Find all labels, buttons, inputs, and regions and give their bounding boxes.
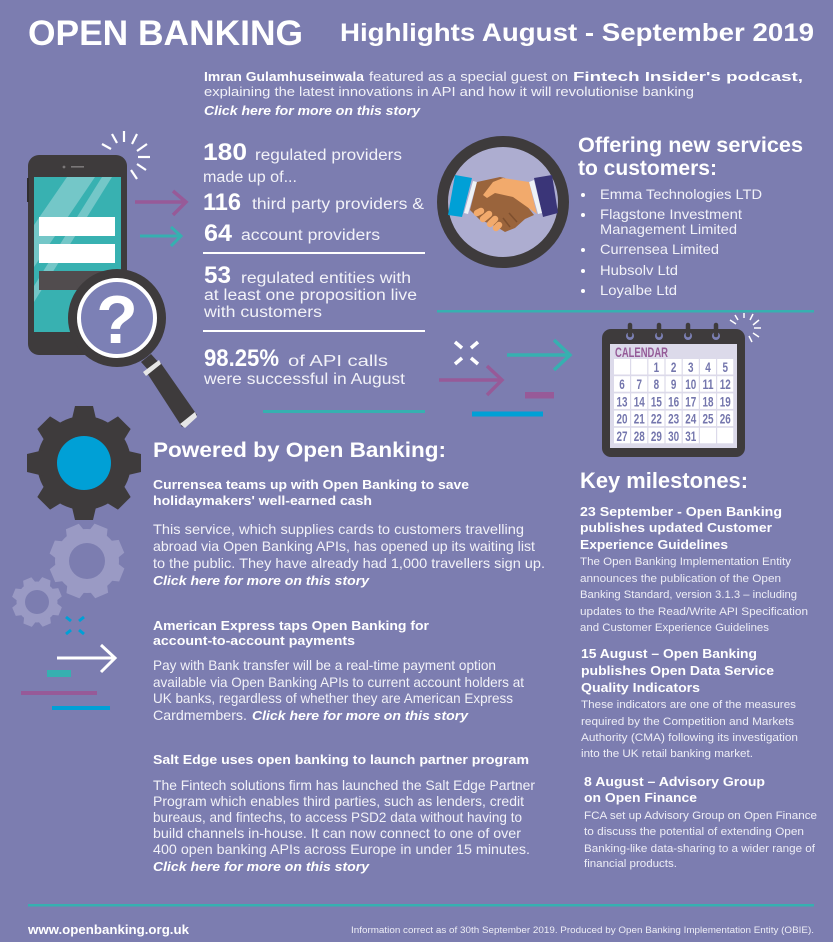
calendar grid: 12 [720, 376, 731, 392]
calendar grid: 1 [654, 359, 659, 375]
decoration: arrows and dashes beside calendar [439, 340, 570, 416]
calendar grid: 24 [685, 411, 696, 427]
calendar rings [626, 325, 720, 340]
story: Salt Edge [153, 752, 535, 874]
milestone: 15 August: publishes Open Data Service [581, 663, 774, 678]
calendar grid: 14 [634, 393, 645, 409]
list: service providers: Management Limited [600, 221, 737, 237]
stat: 180 regulated providers [203, 139, 425, 247]
arrow: magenta [135, 191, 186, 215]
icon: calendar [602, 325, 745, 457]
heading: key milestones: Key milestones: [580, 468, 748, 493]
stat: 180 regulated providers: account providers [241, 227, 380, 244]
story: Salt Edge: Program which enables third parties, such as lenders, credit [153, 793, 524, 809]
milestone: 15 August: into the UK retail banking market. [581, 748, 753, 760]
logo: Open Banking: OPEN BANKING [28, 14, 303, 53]
calendar grid: 20 [616, 411, 628, 427]
milestone: 8 August: Banking-like data-sharing to a wider range of [584, 843, 816, 855]
calendar grid: 13 [616, 393, 628, 409]
milestone: 23 September: announces the publication of the Open [580, 573, 781, 585]
story: Salt Edge: Click here for more on this story [153, 859, 370, 874]
milestone: 23 September: updates to the Read/Write API Specification [580, 606, 808, 618]
calendar grid: 19 [720, 393, 731, 409]
milestone: 15 August: required by the Competition and Markets [581, 716, 794, 728]
story: American Express: Click here for more on this story [252, 708, 469, 723]
calendar grid [614, 359, 733, 444]
calendar grid: 3 [688, 359, 694, 375]
stat: 180 regulated providers: made up of... [203, 169, 297, 186]
calendar grid: 7 [636, 376, 642, 392]
stat: 98.25% API calls: were successful in August [203, 371, 406, 388]
story: American Express: UK banks, regardless of whether they are American Express [153, 690, 513, 706]
calendar grid: 31 [685, 428, 696, 444]
milestone: 15 August: Authority (CMA) following its investigation [581, 732, 798, 744]
calendar grid: 26 [720, 411, 731, 427]
stat: 180 regulated providers: 116 [203, 189, 241, 216]
story: American Express: available via Open Banking APIs to current account holders at [153, 674, 524, 690]
story: Currensea: to the public. They have already had 1,000 travellers sign up. [153, 555, 545, 571]
story: Currensea: Currensea teams up with Open Banking to save [153, 477, 469, 492]
list: service providers: Currensea Limited [600, 241, 719, 257]
story: American Express: American Express taps Open Banking for [153, 618, 429, 633]
calendar grid: 6 [619, 376, 625, 392]
stat: 180 regulated providers: regulated providers [255, 147, 402, 164]
list: service providers: Hubsolv Ltd [600, 262, 678, 278]
story: American Express: Cardmembers. [153, 707, 247, 723]
story: American Express: account-to-account payments [153, 633, 355, 648]
story: Currensea [153, 477, 545, 588]
stat: 53 regulated entities [203, 262, 417, 321]
story: Currensea: This service, which supplies cards to customers travelling [153, 521, 524, 537]
intro text block [204, 69, 803, 118]
stat: 180 regulated providers: 64 [204, 220, 233, 247]
story: Salt Edge: 400 open banking APIs across Europe in under 15 minutes. [153, 841, 530, 857]
list: service providers [581, 186, 762, 298]
calendar grid: 9 [671, 376, 676, 392]
milestone: 8 August: on Open Finance [584, 790, 697, 805]
icon: handshake [442, 142, 564, 262]
footer: disclaimer: Information correct as of 30th September 2019. Produced by Open Banking Implementation Entity (OBIE). [351, 925, 814, 935]
calendar grid: 8 [654, 376, 659, 392]
footer: website: www.openbanking.org.uk [27, 922, 190, 937]
heading: powered by open banking: Powered by Open Banking: [153, 439, 446, 462]
heading: offering new services [578, 134, 803, 180]
calendar grid: 4 [705, 359, 711, 375]
arrow: teal [140, 227, 181, 246]
stat: 98.25% API calls [203, 345, 406, 388]
icon: small faded gear [11, 576, 63, 628]
calendar grid: 29 [651, 428, 662, 444]
stat: 98.25% API calls: of API calls [288, 353, 388, 370]
title: Highlights August - September 2019 [340, 19, 814, 47]
stat: 53 regulated entities: at least one proposition live [204, 287, 417, 304]
story: Currensea: Click here for more on this story [153, 573, 370, 588]
story: Currensea: holidaymakers' well-earned cash [153, 493, 372, 508]
list: service providers: Flagstone Investment [600, 206, 742, 222]
icon: phone with magnifying glass [27, 131, 197, 428]
milestone: 23 September: The Open Banking Implementation Entity [580, 556, 791, 568]
magnifying glass: ? [96, 282, 138, 358]
calendar grid: 27 [616, 428, 628, 444]
calendar grid: 23 [668, 411, 679, 427]
milestone: 15 August: 15 August – Open Banking [581, 646, 757, 661]
calendar grid: 17 [685, 393, 696, 409]
calendar grid: 28 [634, 428, 645, 444]
calendar grid: 10 [685, 376, 696, 392]
intro text block: Imran Gulamhuseinwala [204, 69, 365, 84]
phone body [27, 155, 127, 355]
intro text block: explaining the latest innovations in API and how it will revolutionise banking [204, 84, 694, 99]
milestone: 15 August: Quality Indicators [581, 680, 700, 695]
calendar grid: 18 [702, 393, 714, 409]
milestone: 8 August: FCA set up Advisory Group on Open Finance [584, 810, 817, 822]
calendar grid: 15 [651, 393, 662, 409]
milestone: 8 August [584, 774, 817, 870]
calendar grid: 22 [651, 411, 662, 427]
milestone: 8 August: to discuss the potential of extending Open [584, 826, 804, 838]
calendar grid: 21 [634, 411, 645, 427]
milestone: 23 September: Banking Standard, version 3.1.3 – including [580, 589, 797, 601]
intro text block: Click here for more on this story [204, 103, 421, 118]
stat: 53 regulated entities: with customers [203, 304, 322, 321]
calendar grid: 30 [668, 428, 679, 444]
sparkle lines: calendar [730, 313, 761, 342]
milestone: 15 August [581, 646, 798, 760]
story: Salt Edge: Salt Edge uses open banking to launch partner program [153, 752, 529, 767]
stat: 180 regulated providers: 180 [203, 139, 247, 166]
calendar grid: 5 [722, 359, 728, 375]
calendar grid: 11 [702, 376, 714, 392]
heading: offering new services: Offering new services [578, 134, 803, 157]
icon: medium faded gear [48, 522, 126, 600]
story: Salt Edge: The Fintech solutions firm has launched the Salt Edge Partner [153, 777, 535, 793]
calendar grid: 25 [702, 411, 714, 427]
milestone: 23 September: 23 September - Open Banking [580, 504, 782, 519]
stat: 53 regulated entities: 53 [204, 262, 231, 289]
calendar grid: 2 [671, 359, 676, 375]
milestone: 8 August: 8 August – Advisory Group [584, 774, 765, 789]
milestone: 23 September: Experience Guidelines [580, 537, 728, 552]
heading: offering new services: to customers: [578, 157, 717, 180]
milestone: 23 September: and Customer Experience Guidelines [580, 622, 769, 634]
magnifying glass [68, 269, 197, 428]
milestone: 23 September: publishes updated Customer [580, 520, 772, 535]
story: Currensea: abroad via Open Banking APIs, has opened up its waiting list [153, 538, 535, 554]
story: Salt Edge: build channels in-house. It can now connect to one of over [153, 825, 521, 841]
sparkle lines [102, 131, 150, 179]
milestone: 23 September [580, 504, 808, 634]
decoration: white arrow and coloured dashes [21, 617, 115, 710]
calendar title: CALENDAR [615, 344, 668, 360]
stat: 180 regulated providers: third party providers & [252, 196, 425, 213]
milestone: 8 August: financial products. [584, 858, 677, 870]
story: Salt Edge: bureaus, and fintechs, to access PSD2 data without having to [153, 809, 522, 825]
milestone: 15 August: These indicators are one of the measures [581, 699, 796, 711]
calendar grid: 16 [668, 393, 679, 409]
list: service providers: Emma Technologies LTD [600, 186, 762, 202]
story: American Express: Pay with Bank transfer will be a real-time payment option [153, 657, 496, 673]
intro text block: Fintech Insider's podcast, [573, 69, 803, 84]
story: American Express [153, 618, 524, 723]
stat: 98.25% API calls: 98.25% [204, 345, 279, 372]
intro text block: featured as a special guest on [369, 69, 568, 84]
list: service providers: Loyalbe Ltd [600, 282, 677, 298]
stat: 53 regulated entities: regulated entities with [241, 270, 411, 287]
icon: large gear [27, 406, 141, 520]
